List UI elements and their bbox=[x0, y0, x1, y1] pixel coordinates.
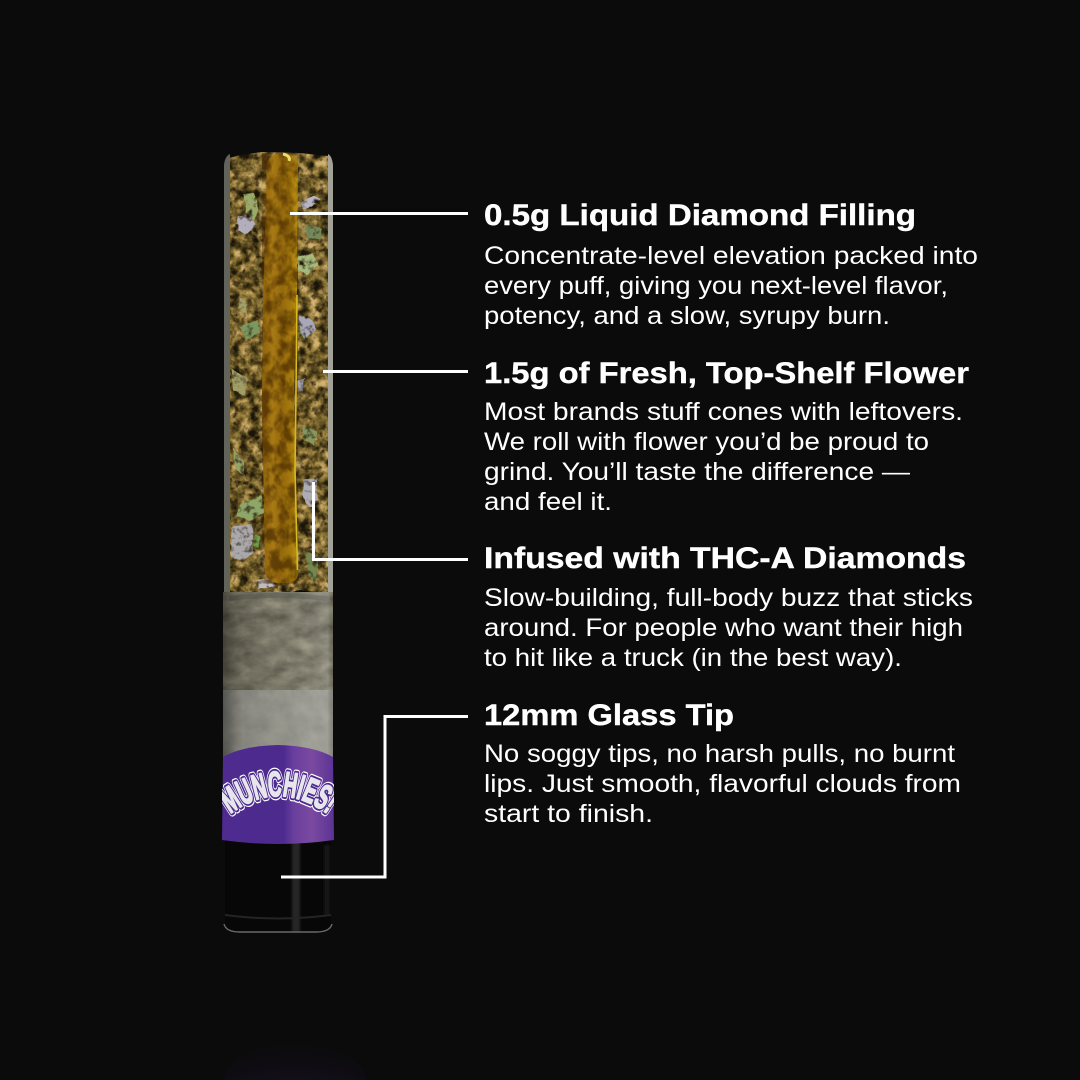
flower filling bbox=[229, 150, 329, 598]
body: grind. You’ll taste the difference — bbox=[484, 458, 910, 486]
body bbox=[484, 584, 973, 672]
body: around. For people who want their high bbox=[484, 614, 963, 642]
glass tip bbox=[224, 838, 332, 933]
dark speckle overlay bbox=[229, 150, 329, 598]
callout line: glass tip bbox=[281, 716, 468, 877]
lower paper wrap bbox=[223, 690, 333, 760]
text block: liquid diamond filling bbox=[484, 199, 978, 330]
body: Slow-building, full-body buzz that sticks bbox=[484, 584, 973, 612]
heading: 1.5g of Fresh, Top-Shelf Flower bbox=[484, 357, 969, 390]
body: No soggy tips, no harsh pulls, no burnt bbox=[484, 740, 955, 768]
body: Most brands stuff cones with leftovers. bbox=[484, 398, 963, 426]
body: and feel it. bbox=[484, 488, 612, 516]
heading: Infused with THC-A Diamonds bbox=[484, 542, 966, 575]
callout line: THC-A diamonds bbox=[314, 482, 468, 560]
tan and green leaf pieces bbox=[232, 193, 322, 582]
body bbox=[484, 398, 963, 516]
wordmark: MUNCHIES! bbox=[222, 768, 334, 817]
heading: 12mm Glass Tip bbox=[484, 699, 734, 732]
callout line: flower bbox=[323, 370, 468, 373]
purple label bbox=[222, 745, 334, 844]
callout line: liquid diamond filling bbox=[290, 212, 468, 215]
text block: glass tip bbox=[484, 699, 961, 828]
glass tube walls bbox=[224, 154, 333, 596]
paper fold shadow at top bbox=[229, 593, 328, 601]
wordmark: MUNCHIES!: MUNCHIES! bbox=[222, 768, 334, 816]
body bbox=[484, 740, 961, 828]
reflection of the cone bbox=[223, 1043, 367, 1080]
body: lips. Just smooth, flavorful clouds from bbox=[484, 770, 961, 798]
body: potency, and a slow, syrupy burn. bbox=[484, 302, 890, 330]
diamond crystals bbox=[231, 195, 320, 589]
body: start to finish. bbox=[484, 800, 653, 828]
body: to hit like a truck (in the best way). bbox=[484, 644, 902, 672]
text block: top-shelf flower bbox=[484, 357, 969, 516]
liquid diamond oil core bbox=[262, 153, 298, 583]
heading: 0.5g Liquid Diamond Filling bbox=[484, 199, 916, 232]
wordmark: MUNCHIES!: MUNCHIES! bbox=[222, 770, 334, 814]
rolling paper bbox=[223, 592, 333, 692]
body: Concentrate-level elevation packed into bbox=[484, 242, 978, 270]
cylinder shading bbox=[223, 592, 333, 762]
body bbox=[484, 242, 978, 330]
infused cone illustration bbox=[222, 152, 334, 933]
wordmark: MUNCHIES!: MUNCHIES! bbox=[222, 768, 334, 817]
body: We roll with flower you’d be proud to bbox=[484, 428, 929, 456]
body: every puff, giving you next-level flavor, bbox=[484, 272, 948, 300]
text block: THC-A diamonds bbox=[484, 542, 973, 672]
